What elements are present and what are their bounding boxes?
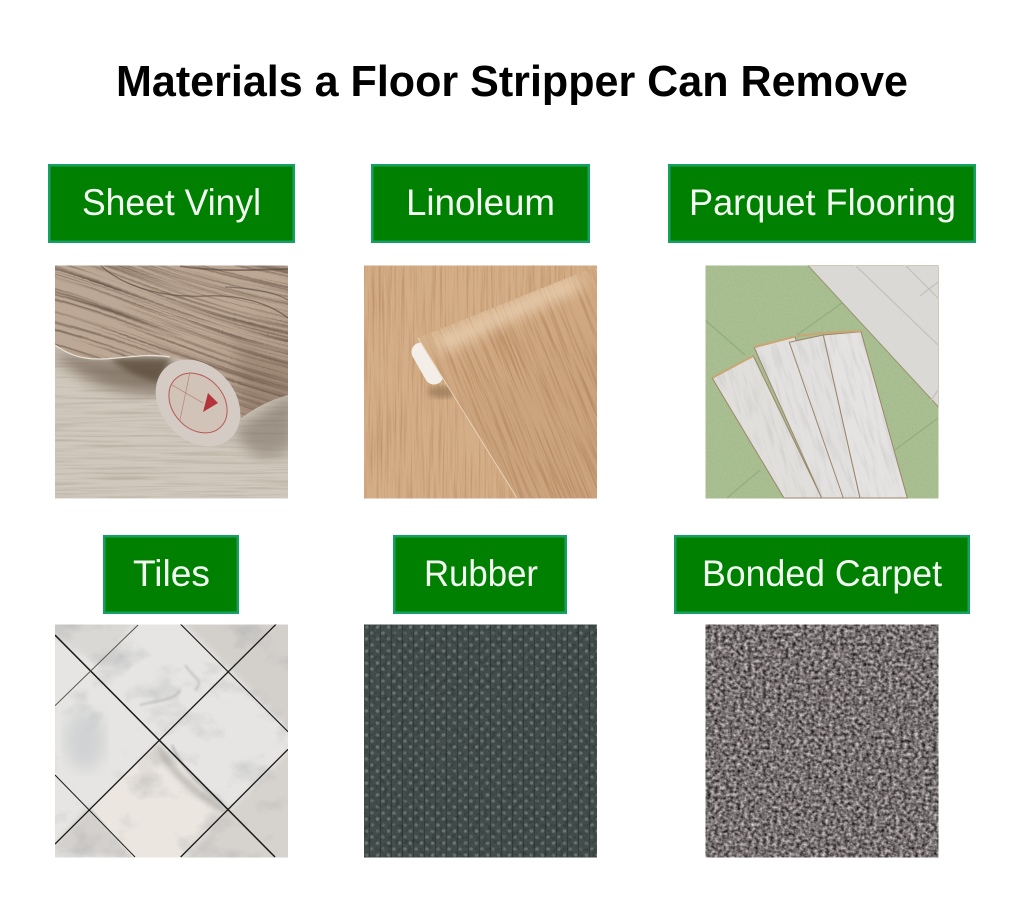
panel: rubber [364, 536, 597, 858]
panel: parquet flooring [668, 164, 976, 498]
image: marble tiles [50, 620, 295, 865]
title: Materials a Floor Stripper Can Remove [116, 57, 908, 106]
label: rubber: Rubber [424, 553, 538, 594]
panel: bonded carpet [675, 536, 969, 858]
roll core [421, 352, 434, 375]
label: tiles [104, 536, 238, 613]
label: parquet flooring [669, 165, 975, 242]
label: tiles: Tiles [133, 553, 210, 594]
four loose planks [712, 332, 907, 498]
image: carpet texture [706, 624, 938, 858]
image: wood-look vinyl roll [55, 266, 288, 498]
label: bonded carpet [675, 536, 969, 613]
label: linoleum: Linoleum [406, 182, 555, 223]
label: rubber [394, 536, 566, 613]
panel: tiles [50, 536, 295, 865]
grout lines [55, 624, 288, 857]
image: rubber texture [364, 624, 597, 858]
label: sheet vinyl: Sheet Vinyl [82, 182, 261, 223]
label: parquet flooring: Parquet Flooring [689, 182, 956, 223]
label: linoleum [372, 165, 589, 242]
image: oak linoleum roll [364, 266, 597, 498]
panel: sheet vinyl [48, 164, 295, 498]
label: bonded carpet: Bonded Carpet [702, 553, 943, 594]
far plank area [808, 266, 938, 407]
label: sheet vinyl [49, 165, 294, 242]
image: parquet planks on green underlay [706, 266, 938, 498]
panel: linoleum [364, 164, 597, 498]
